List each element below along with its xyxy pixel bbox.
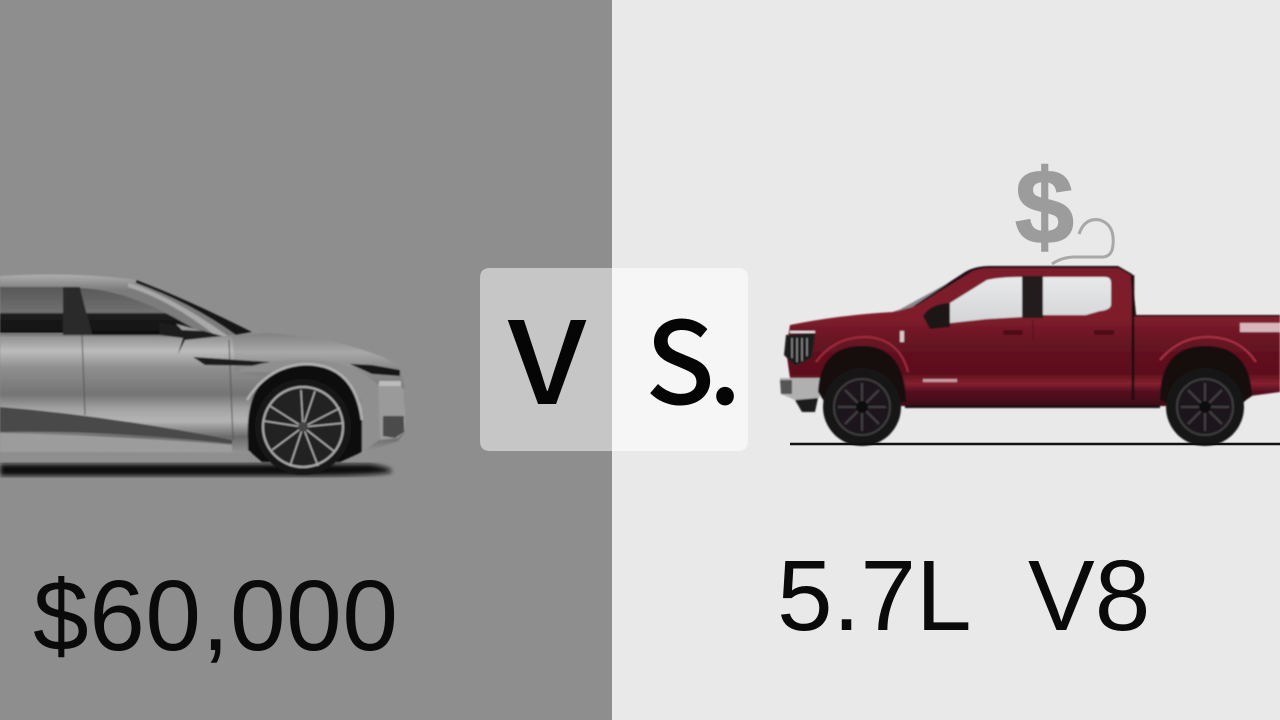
truck door seams and handles xyxy=(900,275,1280,400)
letter S: S xyxy=(645,272,715,437)
front wheel flare xyxy=(816,337,908,372)
front wheel arch xyxy=(818,346,906,410)
car bumper xyxy=(378,382,404,440)
red pickup truck xyxy=(780,266,1280,446)
truck windscreen sliver xyxy=(895,282,950,312)
car hood xyxy=(232,333,400,378)
panel: right background xyxy=(612,0,1280,720)
truck roof edge xyxy=(914,266,1280,316)
car body swoosh xyxy=(0,407,232,444)
car headlight xyxy=(350,364,400,376)
icon: dollar sign with smoke curl xyxy=(1015,148,1113,266)
smoke curl xyxy=(1052,220,1113,264)
engine label: 5.7L xyxy=(777,540,972,652)
truck windows xyxy=(950,276,1111,323)
car shadow xyxy=(0,464,392,476)
panel: left background xyxy=(0,0,612,720)
truck sill xyxy=(905,405,1160,408)
silver electric car xyxy=(0,275,405,476)
badge left half xyxy=(480,268,612,451)
car front fender xyxy=(235,360,382,452)
truck front wheel xyxy=(823,368,901,446)
VS badge xyxy=(480,268,748,451)
car body xyxy=(0,333,405,453)
truck body xyxy=(786,267,1280,406)
truck rear wheel xyxy=(1166,368,1244,446)
letter V: V xyxy=(507,272,587,437)
dollar sign: $ xyxy=(1015,148,1074,266)
ground line xyxy=(790,443,1280,445)
car door lines xyxy=(82,335,233,440)
price label: $60,000 xyxy=(33,560,398,672)
period: . xyxy=(708,272,742,437)
car roof xyxy=(0,275,252,337)
car wheel arch xyxy=(248,364,362,462)
engine label xyxy=(777,540,1150,652)
truck grille xyxy=(784,333,815,366)
engine label: V8 xyxy=(1028,540,1150,652)
truck mirror xyxy=(923,303,950,329)
car windscreen xyxy=(136,280,252,335)
truck bumper xyxy=(780,378,820,400)
car front wheel xyxy=(255,379,351,475)
rear wheel flare xyxy=(1160,337,1256,362)
car side vent xyxy=(193,357,270,366)
car windows xyxy=(0,287,222,354)
badge right half xyxy=(612,268,748,451)
rear wheel arch xyxy=(1160,346,1252,404)
car a-pillar xyxy=(128,283,228,336)
